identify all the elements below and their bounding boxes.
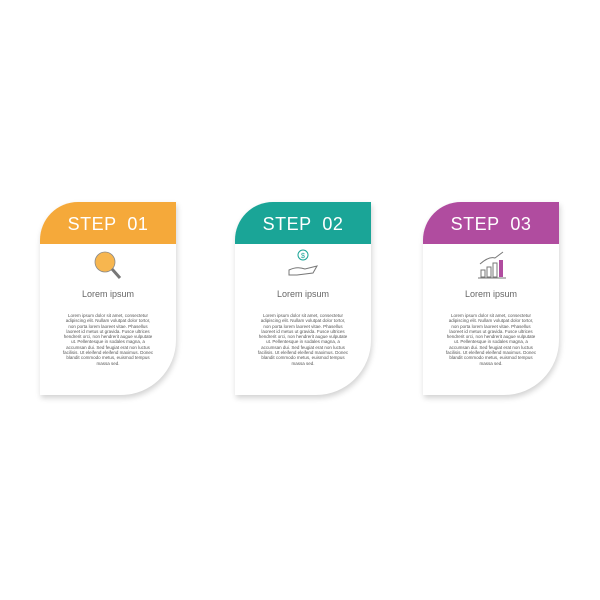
- header: step 01: [40, 202, 176, 244]
- icon: hand with coin: [288, 250, 318, 276]
- icon: bar chart growth: [478, 252, 506, 278]
- heading: lorem ipsum: Lorem ipsum: [277, 289, 329, 299]
- heading: lorem ipsum: Lorem ipsum: [465, 289, 517, 299]
- card: step 01: [40, 202, 176, 395]
- header: step 01: STEP 01: [68, 214, 148, 234]
- card: step 02: [235, 202, 371, 395]
- header: step 02: STEP 02: [263, 214, 343, 234]
- header: step 03: [423, 202, 559, 244]
- heading: lorem ipsum: Lorem ipsum: [82, 289, 134, 299]
- icon: hand with coin: $: [301, 253, 305, 260]
- card: step 03: [423, 202, 559, 395]
- header: step 03: STEP 03: [451, 214, 531, 234]
- text block: Lorem ipsum dolor sit amet, consectetur adipiscing elit. Nullam volutpat dolor tortor, non porta lorem laoreet vitae. Phasellus laoreet id metus ut gravida. Fusce ultrices hendrerit orci, non hendrerit augue vulputate ut. Pellentesque in sodales magna, a accumsan dui. Sed feugiat erat non luctus facilisis. Ut eleifend eleifend maximus. Donec blandit commodo metus, euismod tempus massa sed.: [446, 313, 536, 366]
- header: step 02: [235, 202, 371, 244]
- icon: magnifier: [94, 252, 121, 279]
- text block: Lorem ipsum dolor sit amet, consectetur adipiscing elit. Nullam volutpat dolor tortor, non porta lorem laoreet vitae. Phasellus laoreet id metus ut gravida. Fusce ultrices hendrerit orci, non hendrerit augue vulputate ut. Pellentesque in sodales magna, a accumsan dui. Sed feugiat erat non luctus facilisis. Ut eleifend eleifend maximus. Donec blandit commodo metus, euismod tempus massa sed.: [258, 313, 348, 366]
- text block: Lorem ipsum dolor sit amet, consectetur adipiscing elit. Nullam volutpat dolor tortor, non porta lorem laoreet vitae. Phasellus laoreet id metus ut gravida. Fusce ultrices hendrerit orci, non hendrerit augue vulputate ut. Pellentesque in sodales magna, a accumsan dui. Sed feugiat erat non luctus facilisis. Ut eleifend eleifend maximus. Donec blandit commodo metus, euismod tempus massa sed.: [63, 313, 153, 366]
